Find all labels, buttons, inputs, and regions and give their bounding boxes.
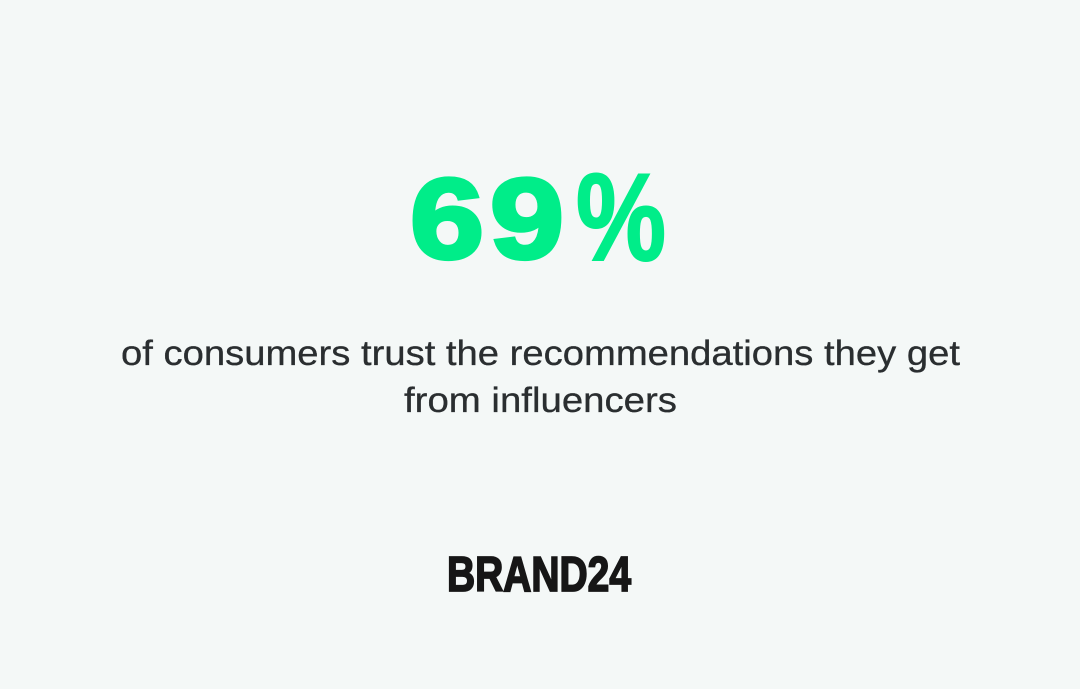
description text	[121, 334, 960, 420]
description text: of consumers trust the recommendations they get	[121, 334, 960, 373]
headline statistic: 69%	[410, 149, 666, 287]
headline statistic: 69%: 9	[490, 156, 564, 283]
headline statistic: 69%: 6	[410, 156, 484, 283]
headline statistic: 69%: %	[576, 149, 666, 287]
logo: BRAND24: BRAND24	[447, 548, 631, 602]
description text: from influencers	[404, 381, 677, 420]
